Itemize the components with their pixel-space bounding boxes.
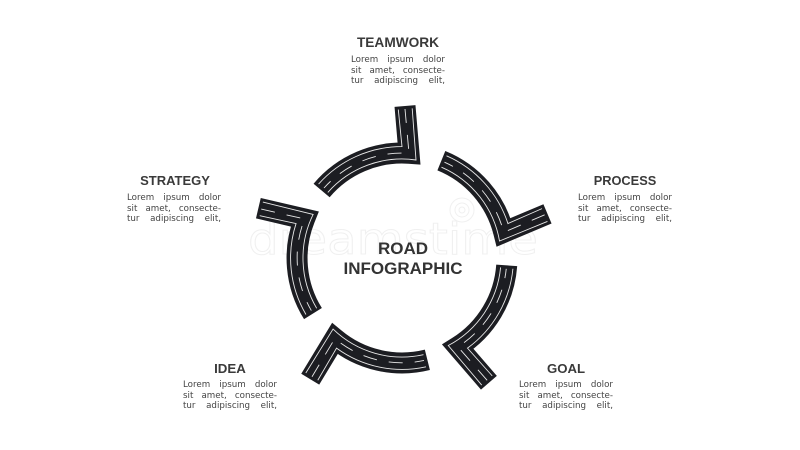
- road: teamwork: [319, 106, 416, 192]
- heading: process: PROCESS: [594, 173, 656, 188]
- road: idea: [301, 303, 431, 430]
- heading: goal: GOAL: [547, 361, 585, 376]
- text: teamwork: sit amet, consecte-: [351, 66, 445, 76]
- text: idea: [183, 380, 277, 411]
- heading: idea: IDEA: [214, 361, 246, 376]
- center title: ROAD: [378, 239, 428, 258]
- text: teamwork: [351, 55, 445, 86]
- text: goal: Lorem ipsum dolor: [519, 380, 613, 390]
- center title: [344, 239, 462, 278]
- center title: INFOGRAPHIC: [344, 259, 462, 278]
- watermark: [248, 198, 538, 265]
- text: strategy: sit amet, consecte-: [127, 204, 221, 214]
- text: process: sit amet, consecte-: [578, 204, 672, 214]
- text: idea: tur adipiscing elit,: [183, 401, 277, 411]
- text: strategy: tur adipiscing elit,: [127, 214, 221, 224]
- text: teamwork: Lorem ipsum dolor: [351, 55, 445, 65]
- heading: strategy: STRATEGY: [140, 173, 210, 188]
- text: strategy: [127, 193, 221, 224]
- text: strategy: Lorem ipsum dolor: [127, 193, 221, 203]
- text: process: [578, 193, 672, 224]
- text: goal: [519, 380, 613, 411]
- text: process: Lorem ipsum dolor: [578, 193, 672, 203]
- text: idea: sit amet, consecte-: [183, 390, 277, 400]
- text: teamwork: tur adipiscing elit,: [351, 76, 445, 86]
- road: process: [439, 132, 551, 251]
- text: goal: sit amet, consecte-: [519, 390, 613, 400]
- road: goal: [429, 262, 559, 389]
- road: strategy: [232, 198, 344, 317]
- heading: teamwork: TEAMWORK: [357, 35, 439, 50]
- text: process: tur adipiscing elit,: [578, 214, 672, 224]
- watermark: dreamstime: [248, 214, 538, 265]
- text: goal: tur adipiscing elit,: [519, 401, 613, 411]
- text: idea: Lorem ipsum dolor: [183, 380, 277, 390]
